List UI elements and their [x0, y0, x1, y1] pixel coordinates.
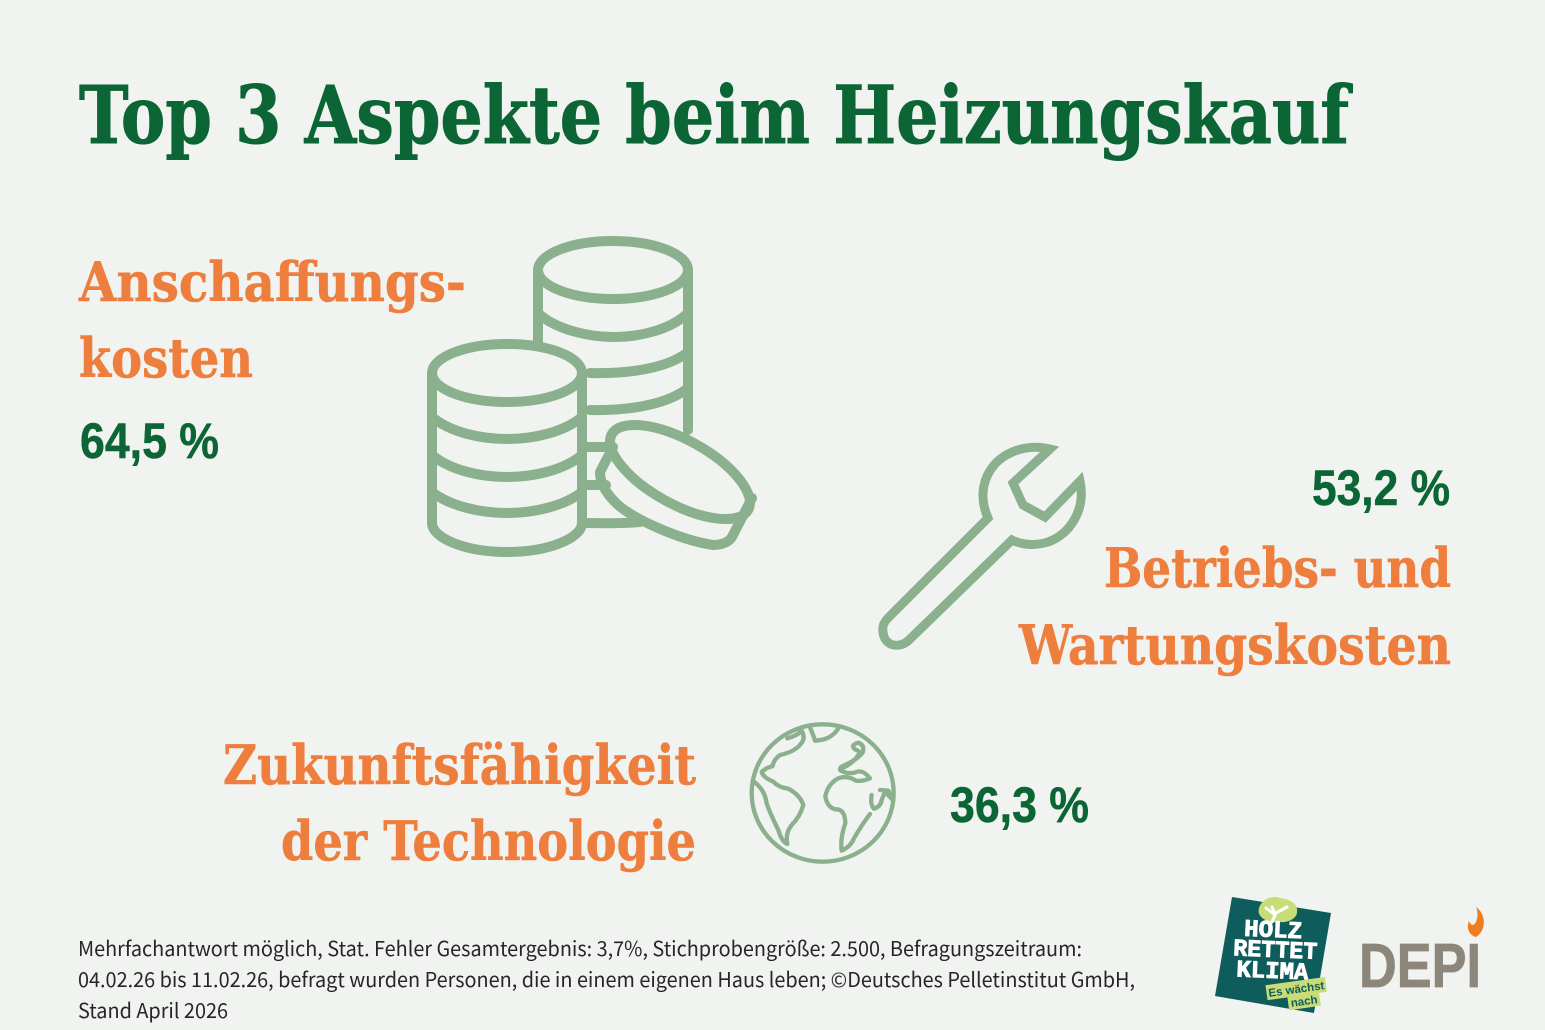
tag: Es wächst nach: nach — [1290, 994, 1318, 1010]
value: 53,2 %: 53,2 % — [1312, 460, 1450, 516]
footnote: Stand April 2026 — [78, 994, 228, 1024]
icon: globe — [752, 724, 894, 862]
tree icon — [1259, 897, 1297, 922]
heading: Anschaffungskosten — [78, 250, 466, 390]
icon: wrench — [883, 447, 1081, 645]
footnote — [78, 932, 1135, 1024]
logo lettering: HOLZ — [1244, 917, 1303, 946]
panel: Betriebs- und Wartungskosten — [883, 447, 1451, 677]
heading: Zukunftsfähigkeit der Technologie: Zukunftsfähigkeit — [223, 733, 696, 797]
flame — [1468, 907, 1484, 937]
back stack — [538, 241, 688, 299]
tag: Es wächst nach — [1265, 977, 1329, 1013]
value: 64,5 %: 64,5 % — [80, 413, 219, 469]
value: 36,3 %: 36,3 % — [950, 777, 1089, 833]
heading: Anschaffungskosten: Anschaffungs- — [78, 250, 466, 314]
logo lettering: KLIMA — [1236, 957, 1309, 988]
tag: Es wächst nach: Es wächst — [1268, 980, 1325, 1000]
footnote: 04.02.26 bis 11.02.26, befragt wurden Personen, die in einem eigenen Haus leben; ©Deutsches Pelletinstitut GmbH, — [78, 963, 1135, 993]
heading: Zukunftsfähigkeit der Technologie: der Technologie — [281, 809, 696, 873]
heading: Betriebs- und Wartungskosten: Wartungskosten — [1018, 613, 1451, 677]
heading: Betriebs- und Wartungskosten — [1018, 536, 1451, 677]
logo: DEPI — [1359, 907, 1484, 1001]
panel: Zukunftsfähigkeit der Technologie — [223, 724, 1089, 873]
heading: Betriebs- und Wartungskosten: Betriebs- und — [1104, 536, 1451, 600]
logo: Holz rettet Klima — [1215, 897, 1331, 1013]
logo lettering — [1232, 916, 1319, 988]
front stack — [432, 344, 582, 402]
footnote: Mehrfachantwort möglich, Stat. Fehler Gesamtergebnis: 3,7%, Stichprobengröße: 2.500, Befragungszeitraum: — [78, 932, 1082, 962]
logo: DEPI: DEPI — [1359, 932, 1481, 1001]
logo lettering: RETTET — [1233, 936, 1318, 967]
heading: Anschaffungskosten: kosten — [79, 326, 253, 390]
heading: Zukunftsfähigkeit der Technologie — [223, 733, 696, 873]
tilted coin — [596, 406, 764, 538]
panel: Anschaffungskosten — [78, 241, 764, 552]
icon: coin stacks — [432, 241, 764, 552]
